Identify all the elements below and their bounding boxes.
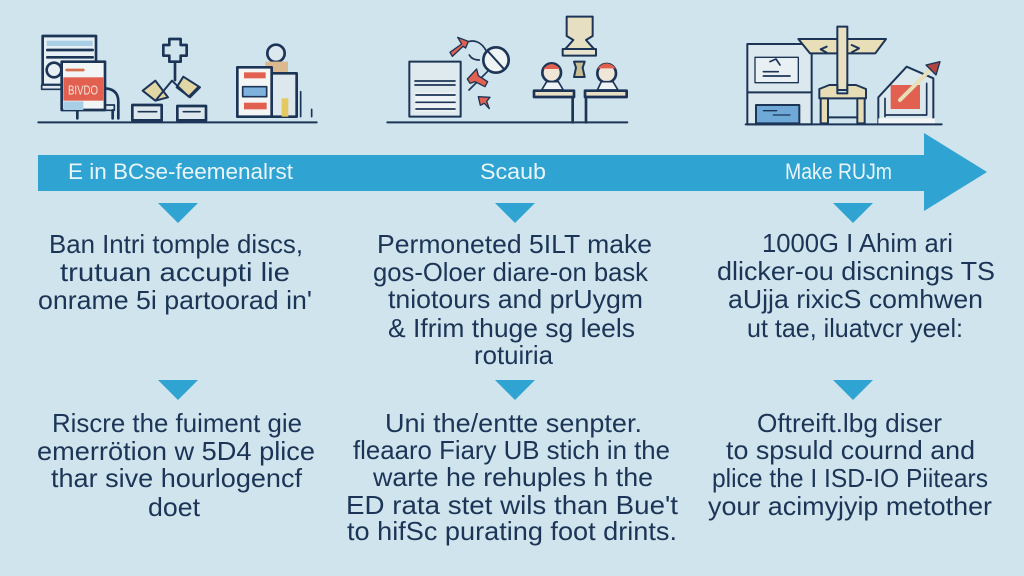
text block: step 2 lower: Uni the/entte senpter.: [385, 408, 642, 438]
baseline: [746, 121, 942, 127]
icon: person with report: [237, 45, 312, 117]
text block: step 3 lower: your acimyjyip metother: [708, 491, 992, 521]
text block: step 3 upper: dlicker-ou discnings TS: [717, 256, 995, 286]
text block: step 2 upper: & Ifrim thuge sg leels: [388, 313, 635, 343]
text block: step 3 lower: to spsuld cournd and: [726, 435, 975, 465]
text block: step 1 upper: [38, 229, 312, 315]
text block: step 3 upper: aUjja rixicS comhwen: [728, 284, 983, 314]
text block: step 1 upper: onrame 5i partoorad in': [38, 285, 312, 315]
label: step 3: Make RUJm: [785, 159, 892, 184]
lower pointers: [158, 380, 873, 400]
text block: step 1 lower: emerrötion w 5D4 plice: [37, 436, 315, 466]
text block: step 1 lower: thar sive hourlogencf: [51, 463, 303, 493]
baseline: [38, 119, 317, 125]
text block: step 2 lower: [346, 408, 679, 546]
text block: step 3 lower: plice the I ISD-IO Piitears: [712, 463, 988, 493]
text block: step 2 lower: warte he rehuples h the: [372, 462, 653, 492]
text block: step 2 lower: ED rata stet wils than Bue't: [346, 490, 679, 520]
icon group: step 1: [38, 36, 317, 122]
icon: hourglass trophy: [563, 17, 596, 77]
text block: step 1 upper: trutuan accupti lie: [60, 257, 290, 287]
text block: step 3 upper: [717, 228, 995, 343]
icon: chair: [75, 88, 118, 118]
text block: step 2 lower: to hifSc purating foot drints.: [347, 516, 677, 546]
text block: step 1 lower: doet: [148, 492, 201, 522]
icon: two people at desks: [534, 63, 627, 122]
text block: step 1 lower: Riscre the fuiment gie: [52, 408, 302, 438]
icon: magnifier and red arrows: [450, 37, 509, 109]
icon: rising chart: [878, 62, 940, 124]
text block: step 1 upper: Ban Intri tomple discs,: [49, 229, 303, 259]
icon: document: [409, 62, 461, 117]
icon: dashboard panel: [747, 44, 812, 124]
text block: step 2 upper: tniotours and prUygm: [388, 284, 643, 314]
text block: step 3 upper: 1000G I Ahim ari: [762, 228, 953, 258]
icon: red card: [62, 62, 105, 110]
upper pointers: [158, 203, 873, 223]
text block: step 2 upper: rotuiria: [474, 340, 554, 370]
label: step 1: E in BCse-feemenalrst: [68, 159, 293, 184]
timeline labels: [68, 159, 892, 184]
timeline arrow: [38, 133, 987, 211]
icon group: step 3: [746, 27, 942, 124]
text block: step 2 upper: [373, 229, 652, 370]
label: step 2: Scaub: [480, 159, 546, 184]
baseline: [387, 119, 627, 125]
icon: signpost: [798, 27, 886, 123]
text block: step 2 upper: Permoneted 5ILT make: [377, 229, 652, 259]
text block: step 1 lower: [37, 408, 315, 522]
icon: monitor: [42, 36, 96, 89]
text block: step 3 lower: [708, 408, 992, 521]
text block: step 2 lower: fleaaro Fiary UB stich in the: [353, 435, 670, 465]
text block: step 3 upper: ut tae, iluatvcr yeel:: [747, 313, 963, 343]
icon: red card: BIVDO: [68, 84, 98, 98]
icon group: step 2: [387, 17, 627, 122]
text block: step 2 upper: gos-Oloer diare-on bask: [373, 257, 649, 287]
icon: medical cross with zigzag: [143, 39, 200, 101]
text block: step 3 lower: Oftreift.lbg diser: [757, 408, 942, 438]
icon: printers: [132, 105, 206, 120]
